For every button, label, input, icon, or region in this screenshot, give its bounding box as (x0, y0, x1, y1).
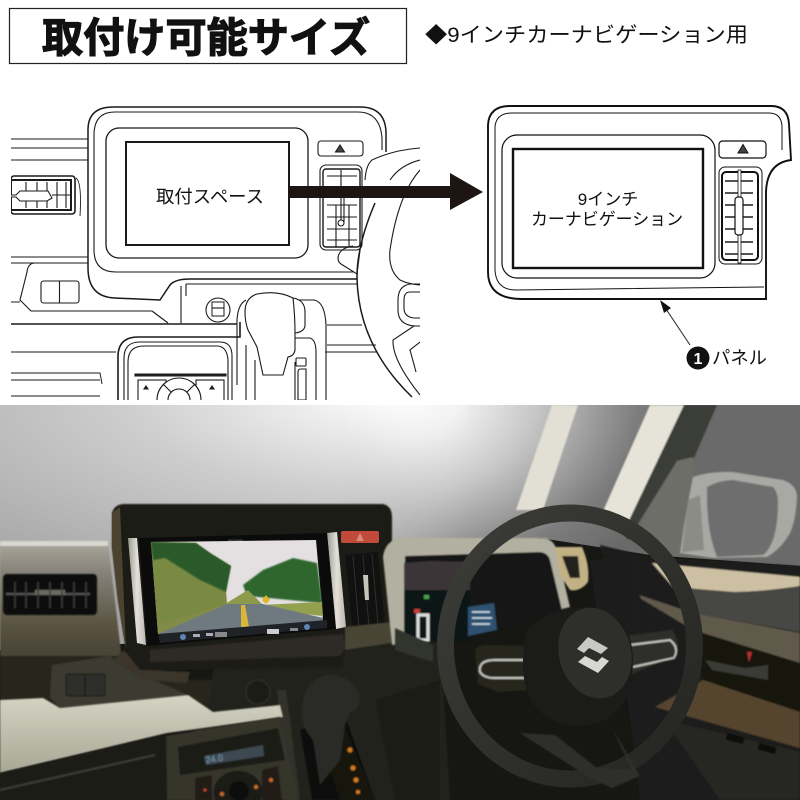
switch plate (50, 656, 188, 708)
road sign (262, 595, 270, 604)
meter hood (383, 538, 640, 645)
label: 9-inch car navigation: カーナビゲーション (531, 210, 683, 229)
air vent (719, 167, 762, 264)
door wood trim (655, 680, 800, 748)
audio control unit (117, 322, 241, 400)
label: 9-inch car navigation (531, 190, 683, 229)
callout: part 1 panel: パネル (712, 348, 767, 368)
suzuki emblem (577, 637, 609, 673)
photo: car interior with navigation installed (0, 405, 800, 800)
left verge (158, 604, 227, 634)
panel inner edge (495, 113, 782, 290)
panel outline (488, 106, 791, 299)
navigation unit screen: carrozzeria (228, 538, 243, 542)
label: 9-inch car navigation: 9インチ (578, 190, 638, 209)
diagram: panel with 9-inch navigation (488, 106, 791, 299)
door tan strip (630, 592, 800, 663)
side mirror (680, 472, 797, 558)
hazard switch (341, 531, 379, 543)
screen bezel (502, 135, 715, 278)
steering wheel (338, 148, 420, 397)
diagram: installation space in car dashboard (11, 107, 420, 422)
left air vent (11, 176, 75, 214)
panel lower left trim (113, 650, 190, 683)
steering hub (523, 599, 642, 726)
hazard button (719, 141, 766, 158)
right meter display (468, 603, 497, 636)
door handle recess (702, 634, 800, 712)
title (10, 8, 406, 64)
title: 取付け可能サイズ (42, 15, 370, 61)
window background (0, 405, 800, 650)
callout: part 1 panel (686, 346, 767, 370)
touch control bar (158, 620, 327, 643)
navigation screen (513, 149, 703, 268)
left dashboard (0, 540, 212, 708)
dark steering column shroud (590, 555, 640, 640)
hazard button (318, 141, 363, 156)
road (158, 604, 323, 634)
navigation panel (112, 504, 392, 683)
center console (212, 642, 450, 800)
navigation unit screen (139, 533, 336, 646)
steering wheel (446, 513, 694, 788)
climate control unit: 24.0 (205, 753, 224, 765)
door switch panel (675, 724, 799, 799)
right air vent (320, 165, 362, 250)
panel lower reflection (150, 634, 345, 662)
left dashboard lines (11, 139, 237, 396)
silver trim strips (128, 532, 346, 645)
cream shelf (0, 695, 283, 773)
door panel (600, 545, 800, 800)
door cream trim (652, 563, 800, 592)
dashboard panel outline (88, 107, 386, 323)
label: installation space: 取付スペース (156, 187, 264, 207)
right trees (243, 558, 322, 603)
panel side edge (112, 507, 126, 650)
tan outer vent (555, 547, 588, 590)
door dark strip (692, 586, 800, 632)
steering spokes (475, 630, 678, 788)
installation space rectangle (126, 142, 289, 245)
cup holder (206, 298, 230, 322)
subtitle: 9-inch car navigation: ◆9インチカーナビゲーション用 (425, 24, 748, 47)
left meter display (404, 561, 470, 590)
dark interior base (0, 538, 800, 800)
left hillside (151, 542, 231, 634)
dashboard air vent (3, 574, 97, 615)
climate control unit (166, 717, 298, 800)
screen bezel (106, 128, 308, 258)
panel lower right trim (345, 622, 392, 650)
gear shifter (302, 675, 375, 800)
panel switch (41, 281, 79, 303)
arrow: from space to panel (289, 173, 483, 210)
gear shifter (237, 293, 376, 400)
map photo sky (151, 540, 323, 634)
indicator stalk left (395, 628, 433, 662)
windshield pillars (516, 405, 718, 540)
panel air vent (345, 552, 385, 628)
lower dash (0, 736, 160, 800)
leader arrow to panel (660, 300, 690, 345)
callout: part 1 panel: 1 (694, 351, 703, 368)
